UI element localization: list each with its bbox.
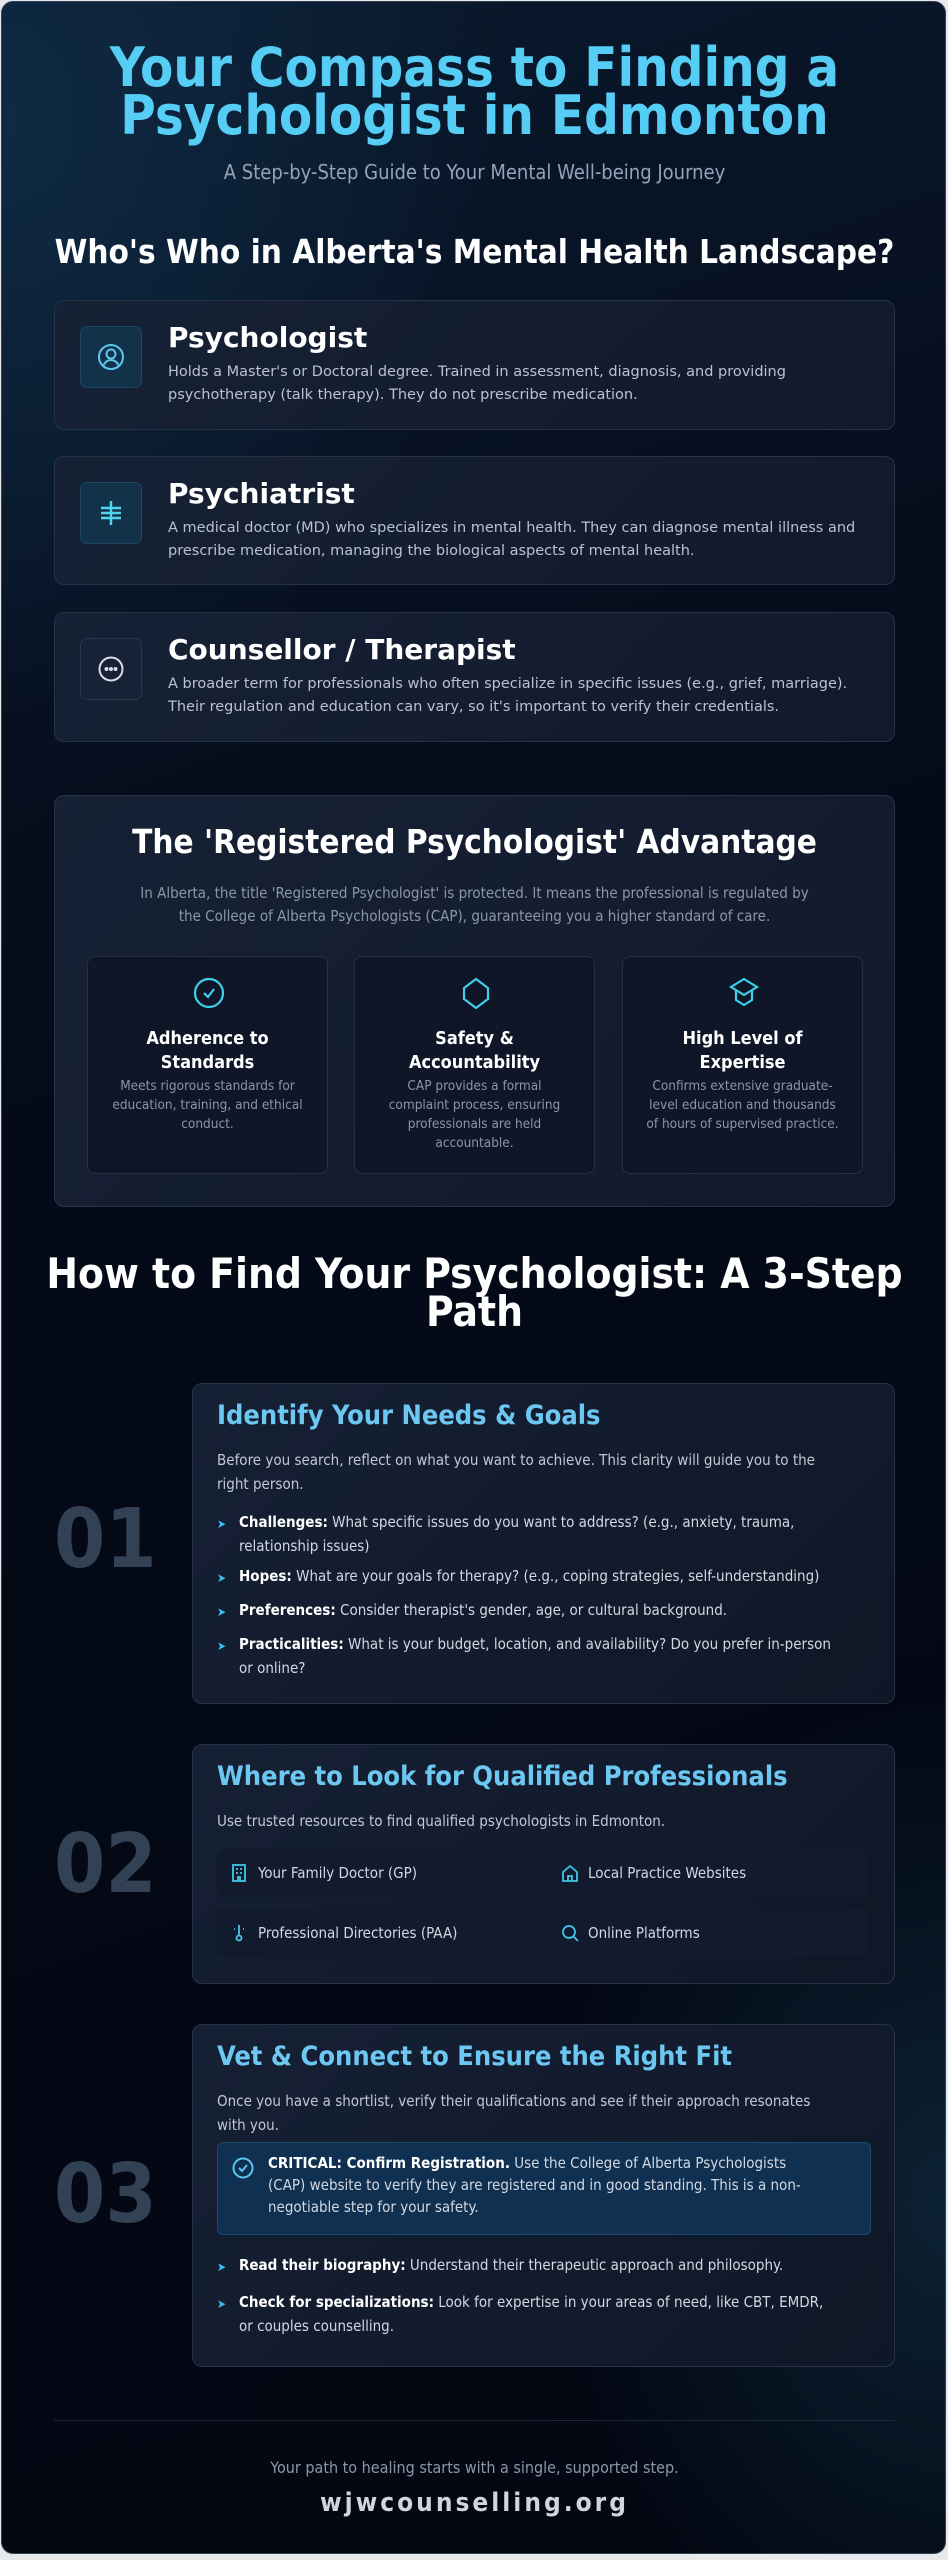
sub-card: standards: education, training, and ethical — [112, 1097, 303, 1113]
sub-card: standards: Adherence to — [146, 1028, 269, 1049]
heading: who's who: Who's Who in Alberta's Mental Health Landscape? — [55, 232, 894, 271]
heading: how to find: How to Find Your Psychologist: A 3-Step — [46, 1249, 903, 1298]
card: counsellor: A broader term for professionals who often specialize in specific issues (e.g., grief, marriage). — [168, 676, 847, 692]
intro text — [140, 884, 809, 925]
icon: chat dots — [80, 638, 142, 700]
step 1 card: Before you search, reflect on what you want to achieve. This clarity will guide you to the — [217, 1451, 815, 1469]
sub-card: expertise: level education and thousands — [649, 1097, 836, 1113]
card: counsellor — [54, 612, 895, 742]
sub-card: standards — [87, 956, 328, 1174]
callout: critical: CRITICAL: Confirm Registration. Use the College of Alberta Psychologists — [268, 2154, 786, 2172]
resource: local websites — [547, 1849, 867, 1897]
resource: online — [547, 1909, 867, 1957]
title: Your Compass to Finding a — [110, 36, 839, 99]
heading: how to find — [46, 1249, 903, 1336]
step number 02: 02 — [54, 1817, 157, 1912]
sub-card: safety: complaint process, ensuring — [389, 1097, 560, 1113]
heading: how to find: Path — [426, 1287, 523, 1336]
step 1 card: or online? — [239, 1659, 305, 1677]
step 3 card: Once you have a shortlist, verify their qualifications and see if their approach resonates — [217, 2092, 810, 2110]
resource: family doctor — [217, 1849, 537, 1897]
card: psychiatrist: prescribe medication, managing the biological aspects of mental health. — [168, 543, 695, 559]
sub-card: expertise — [622, 956, 863, 1174]
step 1 card: Preferences: Consider therapist's gender, age, or cultural background. — [239, 1601, 727, 1619]
card: psychiatrist: Psychiatrist — [168, 477, 355, 510]
step 3 card: or couples counselling. — [239, 2317, 394, 2335]
step 3 card: Check for specializations: Look for expertise in your areas of need, like CBT, EMDR, — [239, 2293, 823, 2311]
step 2 card: Use trusted resources to find qualified psychologists in Edmonton. — [217, 1812, 665, 1830]
step 3 card: Read their biography: Understand their therapeutic approach and philosophy. — [239, 2256, 783, 2274]
callout: critical — [217, 2142, 871, 2235]
step 1 card — [192, 1383, 895, 1704]
step 3 card: with you. — [217, 2116, 279, 2134]
icon: person — [80, 326, 142, 388]
sub-card: safety: CAP provides a formal — [407, 1078, 542, 1094]
intro text: In Alberta, the title 'Registered Psychologist' is protected. It means the professional is regulated by — [140, 884, 809, 902]
step 1 card: relationship issues) — [239, 1537, 370, 1555]
intro text: the College of Alberta Psychologists (CAP), guaranteeing you a higher standard of care. — [179, 907, 770, 925]
sub-card: safety: Accountability — [409, 1052, 540, 1073]
callout: critical: (CAP) website to verify they are registered and in good standing. This is a non- — [268, 2176, 801, 2194]
sub-card: expertise: Confirms extensive graduate- — [652, 1078, 833, 1094]
card: counsellor: Counsellor / Therapist — [168, 633, 516, 666]
card: psychologist — [54, 300, 895, 430]
resource: online: Online Platforms — [588, 1924, 700, 1942]
sub-card: standards: Meets rigorous standards for — [120, 1078, 295, 1094]
card: psychologist: Holds a Master's or Doctoral degree. Trained in assessment, diagnosis, and providing — [168, 364, 786, 380]
sub-card: standards: Standards — [161, 1052, 254, 1073]
text: Psychologist — [168, 321, 367, 354]
sub-card: safety: professionals are held — [408, 1116, 541, 1132]
subtitle: A Step-by-Step Guide to Your Mental Well-being Journey — [224, 160, 725, 184]
sub-card: safety — [354, 956, 595, 1174]
card: psychiatrist: A medical doctor (MD) who specializes in mental health. They can diagnose mental illness and — [168, 520, 855, 536]
sub-card: safety: Safety & — [435, 1028, 514, 1049]
step 1 card: Challenges: What specific issues do you want to address? (e.g., anxiety, trauma, — [239, 1513, 794, 1531]
heading: The 'Registered Psychologist' Advantage — [132, 822, 817, 861]
icon: caduceus — [80, 482, 142, 544]
resource: directories: Professional Directories (PAA) — [258, 1924, 457, 1942]
title — [109, 36, 839, 147]
sub-card: expertise: of hours of supervised practice. — [646, 1116, 839, 1132]
sub-card: safety: accountable. — [435, 1135, 514, 1151]
sub-card: expertise: Expertise — [700, 1052, 786, 1073]
step 3 card — [192, 2024, 895, 2367]
resource: family doctor: Your Family Doctor (GP) — [258, 1864, 417, 1882]
title: Psychologist in Edmonton — [120, 84, 829, 147]
sub-card: expertise: High Level of — [682, 1028, 803, 1049]
step 1 card: right person. — [217, 1475, 304, 1493]
sub-card: standards: conduct. — [181, 1116, 234, 1132]
panel: registered psychologist advantage — [54, 795, 895, 1207]
card: psychiatrist — [54, 456, 895, 585]
card: psychologist: psychotherapy (talk therapy). They do not prescribe medication. — [168, 387, 638, 403]
callout: critical: negotiable step for your safety. — [268, 2198, 479, 2216]
step 1 card: Practicalities: What is your budget, location, and availability? Do you prefer in-person — [239, 1635, 831, 1653]
footer domain: wjwcounselling.org — [320, 2488, 629, 2518]
step 2 card: Where to Look for Qualified Professionals — [217, 1761, 788, 1792]
resource: local websites: Local Practice Websites — [588, 1864, 746, 1882]
card: counsellor: Their regulation and education can vary, so it's important to verify their credentials. — [168, 699, 779, 715]
footer tagline: Your path to healing starts with a single, supported step. — [270, 2458, 679, 2477]
step 2 card — [192, 1744, 895, 1984]
resource: directories — [217, 1909, 537, 1957]
step number 03: 03 — [54, 2147, 157, 2242]
step 3 card: Vet & Connect to Ensure the Right Fit — [217, 2041, 732, 2072]
step 1 card: Hopes: What are your goals for therapy? (e.g., coping strategies, self-understanding) — [239, 1567, 819, 1585]
step 1 card: Identify Your Needs & Goals — [217, 1400, 601, 1431]
step number 01: 01 — [54, 1492, 157, 1587]
